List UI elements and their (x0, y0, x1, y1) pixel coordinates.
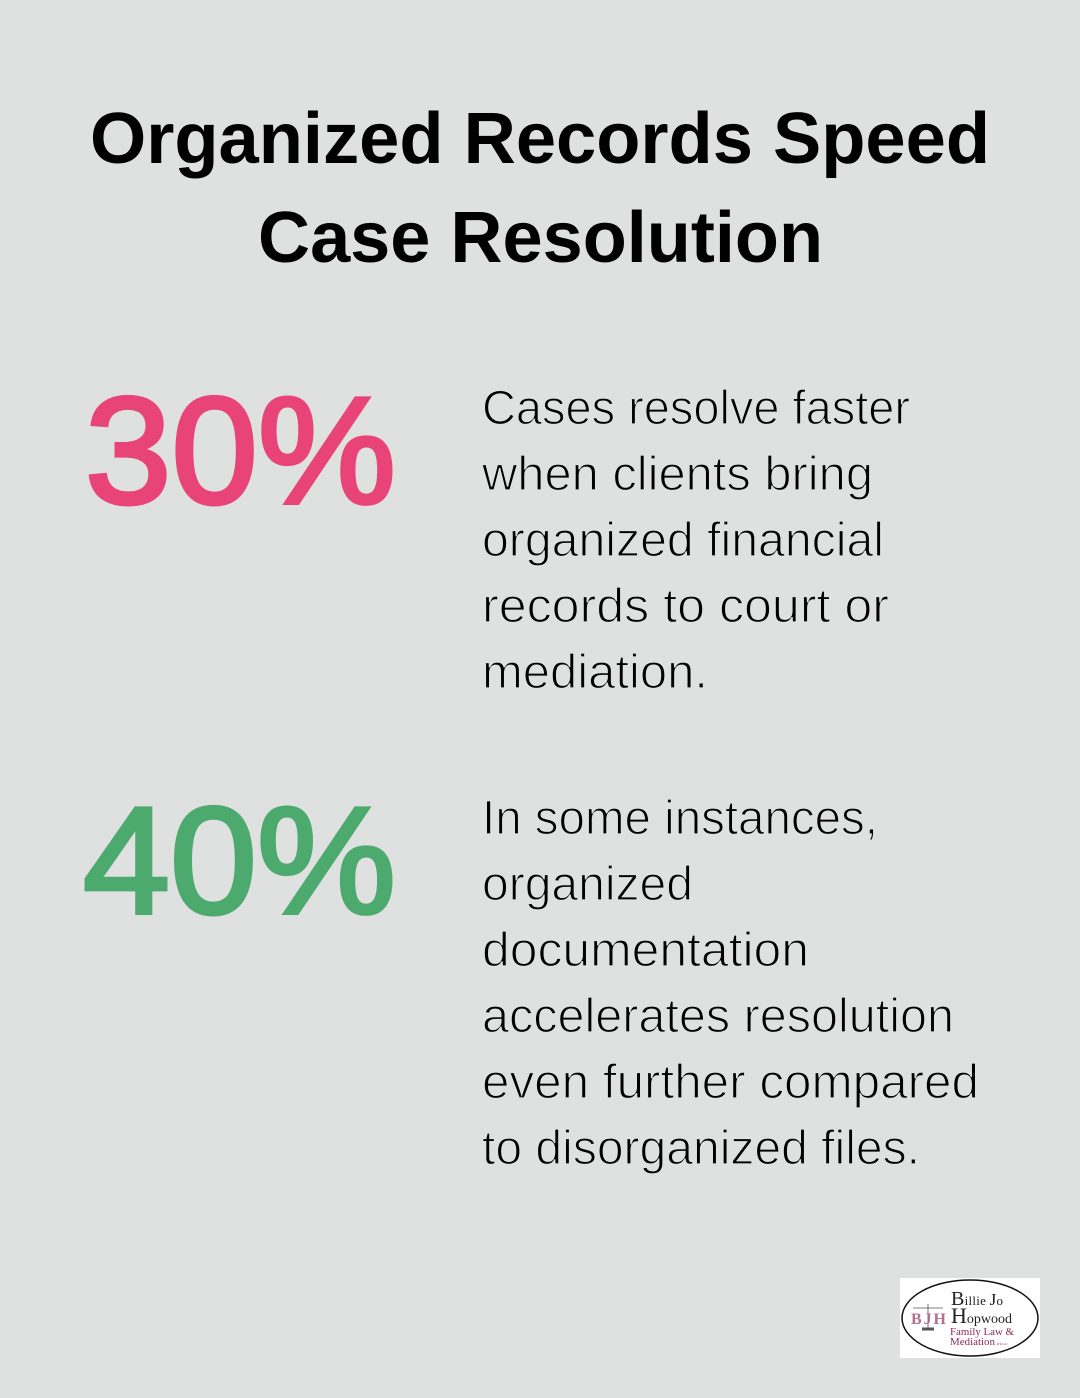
text block: 40% description: organized (482, 858, 693, 911)
text block: 30% description: mediation. (482, 646, 708, 699)
logo tagline: PLLC (997, 1342, 1009, 1346)
text block: 40% description: to disorganized files. (482, 1122, 920, 1175)
logo tagline (950, 1327, 1014, 1348)
text block: 40% description: In some instances, (482, 792, 878, 845)
text block: 30% description: when clients bring (481, 448, 873, 501)
text block: 30% description (481, 382, 910, 699)
logo monogram: BJH (911, 1311, 947, 1328)
stat: 30%: 30% (85, 366, 396, 536)
logo (900, 1278, 1040, 1358)
logo name (951, 1288, 1012, 1328)
title: Organized Records Speed (90, 99, 990, 179)
text block: 40% description: accelerates resolution (482, 990, 954, 1043)
logo name: Billie Jo (951, 1288, 1003, 1310)
logo tagline: Mediation (950, 1337, 995, 1348)
text block: 30% description: organized financial (482, 514, 884, 567)
text block: 30% description: Cases resolve faster (482, 382, 910, 435)
title: Case Resolution (258, 198, 823, 278)
text block: 40% description: documentation (482, 924, 809, 977)
stat: 40%: 40% (83, 776, 396, 946)
icon: scales of justice (913, 1304, 943, 1329)
logo tagline: Family Law & (950, 1327, 1014, 1338)
logo name: Hopwood (951, 1303, 1012, 1328)
text block: 40% description (482, 792, 979, 1175)
text block: 40% description: even further compared (482, 1056, 979, 1109)
title (90, 99, 990, 278)
text block: 30% description: records to court or (482, 580, 889, 633)
